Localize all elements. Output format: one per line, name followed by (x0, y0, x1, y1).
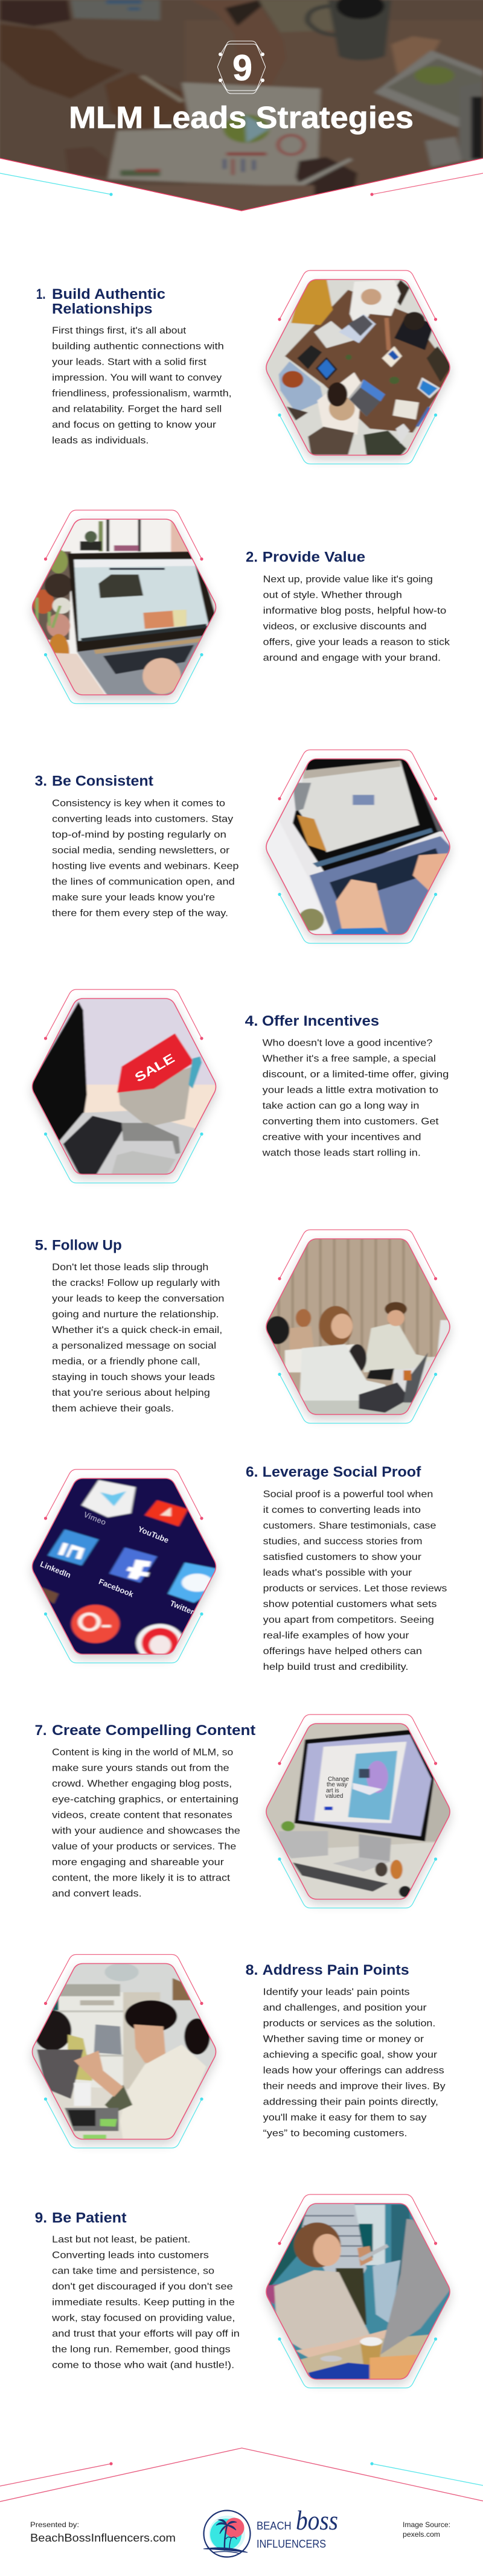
section 8: Address Pain Points (28, 1955, 446, 2148)
logo: BEACH (257, 2520, 292, 2532)
body text 6: customers. Share testimonials, case (263, 1521, 436, 1531)
body text 5: a personalized message on social (52, 1341, 216, 1351)
body text 2: Next up, provide value like it's going (263, 574, 433, 584)
body text 4: take action can go a long way in (263, 1101, 419, 1111)
body text 9: don't get discouraged if you don't see (52, 2282, 233, 2292)
body text 8: addressing their pain points directly, (263, 2097, 438, 2107)
body text 2: videos, or exclusive discounts and (263, 621, 427, 631)
app labels: Vimeo (82, 1510, 107, 1527)
body text 7: videos, create content that resonates (52, 1810, 232, 1820)
body text 9: Converting leads into customers (52, 2251, 209, 2261)
body text 8: Whether saving time or money or (263, 2034, 424, 2044)
heading 3: 3. (35, 773, 47, 790)
body text 7: and convert leads. (52, 1888, 142, 1899)
body text 5: them achieve their goals. (52, 1404, 174, 1414)
number badge: 9 (232, 48, 252, 88)
body text 1: and relatability. Forget the hard sell (52, 404, 222, 415)
body text 6: Social proof is a powerful tool when (263, 1489, 433, 1500)
number badge (217, 41, 266, 94)
body text 7: content, the more likely it is to attract (52, 1873, 231, 1883)
body text 7: eye-catching graphics, or entertaining (52, 1794, 238, 1804)
body text 6: help build trust and credibility. (263, 1662, 408, 1672)
heading 1: 1. (36, 286, 46, 302)
body text 1: friendliness, professionalism, warmth, (52, 389, 232, 399)
body text 5: staying in touch shows your leads (52, 1372, 215, 1382)
body text 3: converting leads into customers. Stay (52, 814, 233, 824)
body text 5: that you're serious about helping (52, 1388, 210, 1398)
body text 1 (52, 326, 232, 446)
body text 1: your leads. Start with a solid first (52, 357, 207, 368)
body text 1: leads as individuals. (52, 436, 149, 446)
body text 4: Whether it's a free sample, a special (263, 1054, 436, 1064)
sale tag text: SALE (133, 1051, 177, 1085)
body text 6: satisfied customers to show your (263, 1552, 421, 1562)
body text 3: social media, sending newsletters, or (52, 845, 229, 855)
body text 9: work, stay focused on providing value, (51, 2313, 235, 2324)
decorative cyan line (0, 173, 113, 196)
heading 9: Be Patient (52, 2210, 127, 2226)
body text 6: it comes to converting leads into (263, 1505, 421, 1515)
body text 2: out of style. Whether through (263, 590, 402, 600)
heading 1: Build Authentic (52, 286, 165, 302)
presented by: Presented by: (30, 2520, 79, 2529)
body text 1: First things first, it's all about (52, 326, 187, 336)
header banner (0, 0, 483, 222)
body text 9: come to those who wait (and hustle!). (52, 2360, 234, 2371)
image source: Image Source: (403, 2520, 450, 2529)
body text 3: hosting live events and webinars. Keep (52, 861, 239, 871)
body text 5: going and nurture the relationship. (52, 1309, 219, 1320)
body text 6: studies, and success stories from (263, 1536, 423, 1547)
body text 5 (52, 1262, 224, 1414)
body text 2: offers, give your leads a reason to stick (263, 637, 450, 647)
body text 3: Consistency is key when it comes to (52, 798, 225, 808)
heading 5: Follow Up (52, 1238, 122, 1254)
photo 3: typing on laptop with Google page (262, 750, 456, 943)
body text 9: the long run. Remember, good things (52, 2345, 231, 2355)
body text 2 (263, 574, 450, 663)
heading 4: 4. (245, 1013, 258, 1029)
image source: pexels.com (403, 2530, 440, 2539)
logo emblem (203, 2510, 250, 2557)
image source (403, 2520, 450, 2539)
heading 4: Offer Incentives (262, 1013, 379, 1029)
section 7: Create Compelling Content (35, 1715, 456, 1908)
photo 4: shopping cart sale sign on laptop (28, 989, 222, 1183)
body text 8: achieving a specific goal, show your (263, 2050, 437, 2060)
body text 4: creative with your incentives and (263, 1133, 421, 1143)
photo 8: woman thinking at laptop (28, 1955, 222, 2148)
heading 5: 5. (35, 1238, 48, 1254)
body text 2: informative blog posts, helpful how-to (263, 606, 447, 616)
footer chevron lines (0, 2448, 483, 2502)
body text 3 (52, 798, 239, 918)
body text 5: Whether it's a quick check-in email, (52, 1325, 222, 1335)
heading 7: Create Compelling Content (52, 1722, 255, 1739)
body text 5: your leads to keep the conversation (52, 1294, 224, 1304)
body text 8: and challenges, and position your (263, 2002, 427, 2013)
heading 9: 9. (35, 2210, 47, 2226)
photo 6: social media app icons (28, 1469, 222, 1663)
heading 1 (36, 286, 165, 318)
body text 2: around and engage with your brand. (263, 653, 441, 663)
body text 8: Identify your leads' pain points (263, 1987, 410, 1997)
body text 5: the cracks! Follow up regularly with (52, 1278, 220, 1288)
section 5: Follow Up (35, 1230, 456, 1424)
body text 9: Last but not least, be patient. (52, 2235, 190, 2245)
heading 2: 2. (246, 549, 258, 566)
body text 1: and focus on getting to know your (52, 420, 216, 430)
presented by (30, 2520, 176, 2544)
logo (203, 2505, 338, 2557)
body text 6: you apart from competitors. Seeing (263, 1615, 434, 1625)
body text 8: leads how your offerings can address (263, 2065, 444, 2076)
heading 7: 7. (35, 1722, 47, 1739)
body text 7: Content is king in the world of MLM, so (52, 1747, 234, 1757)
heading 8: 8. (246, 1962, 258, 1978)
body text 5: Don't let those leads slip through (52, 1262, 208, 1273)
header photo (0, 0, 483, 222)
body text 9: immediate results. Keep putting in the (52, 2298, 235, 2308)
body text 4: watch those leads start rolling in. (262, 1148, 421, 1159)
body text 4 (262, 1038, 449, 1159)
body text 3: the lines of communication open, and (52, 877, 235, 887)
photo 7: desktop monitor (262, 1715, 456, 1908)
body text 3: top-of-mind by posting regularly on (52, 829, 226, 840)
monitor headline text: art is (326, 1788, 339, 1794)
body text 7: crowd. Whether engaging blog posts, (52, 1779, 232, 1789)
body text 4: your leads a little extra motivation to (263, 1085, 438, 1096)
body text 8: “yes” to becoming customers. (263, 2128, 407, 2138)
body text 4: discount, or a limited-time offer, giving (263, 1070, 449, 1080)
section 3: Be Consistent (35, 750, 456, 943)
body text 6: real-life examples of how your (263, 1631, 409, 1641)
body text 7 (51, 1747, 240, 1899)
section 1: Build Authentic Relationships (36, 270, 456, 464)
body text 7: make sure yours stands out from the (52, 1763, 229, 1773)
body text 8: their needs and improve their lives. By (263, 2081, 446, 2091)
heading 2: Provide Value (263, 549, 365, 566)
app labels: Facebook (97, 1577, 135, 1599)
body text 8: you'll make it easy for them to say (263, 2112, 427, 2123)
body text 1: impression. You will want to convey (52, 373, 222, 383)
heading 3: Be Consistent (52, 773, 153, 790)
logo: boss (296, 2505, 338, 2536)
section 6: Leverage Social Proof (28, 1464, 447, 1672)
heading 8: Address Pain Points (263, 1962, 409, 1978)
body text 6: show potential customers what sets (263, 1599, 437, 1609)
body text 6: leads what's possible with your (263, 1568, 412, 1578)
body text 9 (51, 2235, 240, 2371)
app labels: YouTube (136, 1524, 170, 1545)
photo 5: call center workers (262, 1230, 456, 1424)
section 9: Be Patient (35, 2194, 456, 2388)
heading 6: Leverage Social Proof (263, 1464, 421, 1480)
body text 3: make sure your leads know you're (52, 892, 215, 903)
monitor headline text: Change (328, 1776, 349, 1783)
heading 1: Relationships (52, 301, 152, 318)
body text 6: offerings have helped others can (263, 1646, 422, 1657)
body text 8: products or services as the solution. (263, 2018, 435, 2028)
photo 9: woman at computer with coworker (262, 2194, 456, 2388)
section 2: Provide Value (28, 510, 450, 704)
body text 9: can take time and persistence, so (52, 2266, 214, 2277)
banner edge (0, 158, 483, 211)
body text 4: converting them into customers. Get (263, 1117, 439, 1127)
section 4: Offer Incentives (28, 989, 449, 1183)
presented by: BeachBossInfluencers.com (30, 2532, 176, 2544)
heading 6: 6. (246, 1464, 258, 1480)
body text 7: value of your products or services. The (52, 1841, 236, 1852)
logo: INFLUENCERS (257, 2538, 326, 2550)
monitor headline text: the way (327, 1782, 347, 1788)
title: MLM Leads Strategies (69, 100, 414, 135)
monitor headline text (325, 1776, 349, 1800)
photo 2: laptop on desk with plants (28, 510, 222, 704)
body text 3: there for them every step of the way. (52, 908, 228, 918)
body text 8 (263, 1987, 446, 2138)
monitor headline text: valued (325, 1793, 343, 1800)
decorative pink line (370, 173, 483, 196)
body text 9: and trust that your efforts will pay off in (52, 2329, 240, 2339)
body text 7: with your audience and showcases the (51, 1826, 240, 1836)
body text 6: products or services. Let those reviews (263, 1584, 447, 1594)
body text 7: more engaging and shareable your (52, 1857, 224, 1867)
body text 1: building authentic connections with (52, 342, 224, 352)
footer (0, 2448, 483, 2557)
app labels (39, 1510, 196, 1616)
body text 6 (263, 1489, 447, 1672)
app labels: Twitter (168, 1599, 196, 1616)
app labels: LinkedIn (39, 1559, 72, 1580)
body text 4: Who doesn't love a good incentive? (263, 1038, 433, 1049)
photo 1: team meeting at table (262, 270, 456, 464)
body text 5: media, or a friendly phone call, (52, 1357, 200, 1367)
